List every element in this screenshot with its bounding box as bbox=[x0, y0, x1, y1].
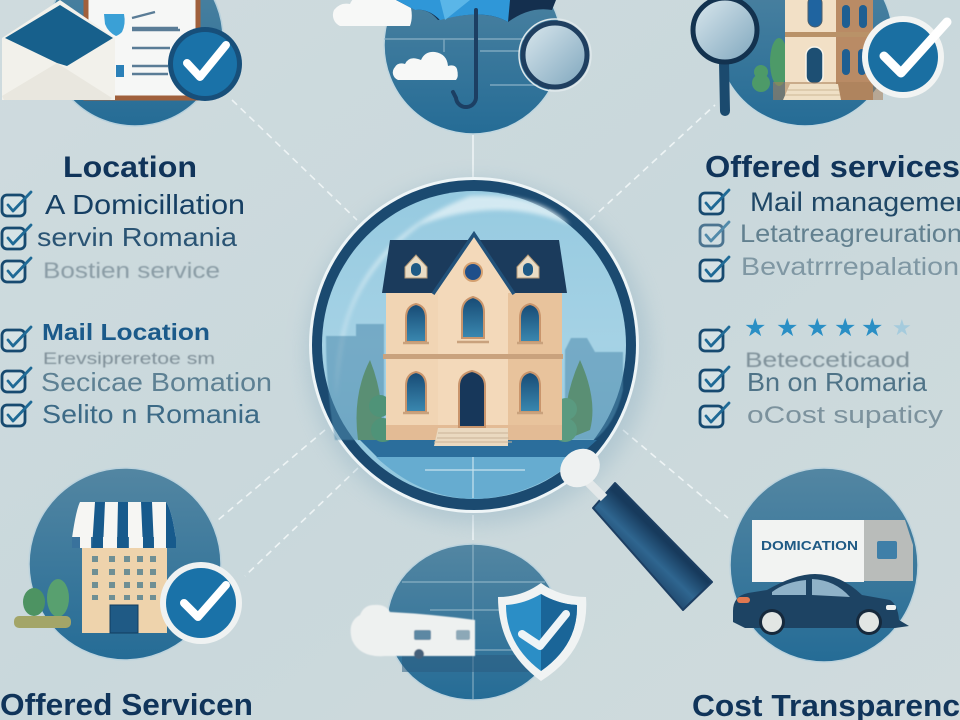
hedges bbox=[14, 579, 71, 628]
truck: DOMICATION bbox=[761, 538, 858, 553]
document bbox=[86, 0, 198, 98]
magnifier bbox=[519, 19, 591, 91]
item 3: Bevatrrrepalation bbox=[741, 253, 959, 281]
check badge bbox=[160, 562, 242, 644]
trees bbox=[356, 360, 592, 442]
item 4: Secicae Bomation bbox=[41, 367, 272, 397]
magnifier bbox=[693, 0, 757, 111]
handle bbox=[588, 482, 712, 610]
icon: storefront, bottom left bbox=[14, 468, 242, 660]
central magnifying glass with house bbox=[306, 177, 712, 610]
ground bbox=[360, 440, 597, 499]
house bbox=[382, 234, 567, 446]
van bbox=[351, 605, 475, 659]
item 5: oCost supaticy bbox=[747, 402, 943, 429]
skyline bbox=[326, 324, 623, 440]
subheading: mail location bbox=[2, 319, 210, 351]
icon: building under magnifier, top right bbox=[693, 0, 947, 126]
item 3 bbox=[2, 258, 220, 283]
item 2: Letatreagreuration bbox=[740, 220, 960, 248]
item 4: Bn on Romaria bbox=[747, 367, 928, 397]
truck bbox=[752, 520, 913, 582]
blurred line: Betecceticaod bbox=[745, 349, 910, 372]
trees bbox=[752, 38, 788, 92]
road bbox=[402, 655, 545, 672]
umbrella bbox=[396, 0, 556, 107]
roof bbox=[382, 240, 567, 293]
star rating bbox=[700, 314, 912, 351]
shield bbox=[498, 583, 586, 681]
clouds bbox=[333, 0, 458, 80]
envelope bbox=[2, 0, 115, 100]
blurred line: Erevsipreretoe sm bbox=[43, 349, 215, 368]
building bbox=[773, 0, 883, 100]
item 1: A Domicillation bbox=[45, 189, 245, 220]
check badge bbox=[168, 27, 242, 101]
star rating: ★ bbox=[892, 315, 912, 340]
heading: Location bbox=[63, 151, 197, 184]
item 2: servin Romania bbox=[37, 222, 238, 252]
subheading: mail location: Mail Location bbox=[42, 319, 210, 345]
upper windows bbox=[406, 297, 540, 412]
connector lines bbox=[218, 100, 728, 576]
item 5 bbox=[700, 402, 943, 429]
heading: Offered services bbox=[705, 149, 960, 184]
awning bbox=[72, 502, 176, 548]
icon: umbrella and magnifier, top centre bbox=[333, 0, 591, 134]
item 3: Bostien service bbox=[43, 258, 220, 283]
item 1: Mail managemer bbox=[750, 187, 960, 217]
round window bbox=[464, 263, 482, 281]
star rating: ★★★★★ bbox=[744, 314, 883, 342]
car bbox=[733, 574, 909, 635]
item 5: Selito n Romania bbox=[42, 399, 261, 429]
dormers bbox=[405, 255, 539, 278]
plinth bbox=[386, 425, 562, 440]
heading and checklist: location bbox=[2, 151, 272, 429]
door bbox=[459, 371, 485, 427]
icon: truck and car, bottom right bbox=[730, 468, 918, 662]
floor band bbox=[383, 354, 563, 359]
icon: shield and van, bottom centre bbox=[351, 544, 586, 700]
icon: mail and document, top left bbox=[2, 0, 242, 126]
heading and checklist: offered services bbox=[700, 149, 960, 429]
steps bbox=[434, 428, 508, 446]
check badge bbox=[862, 16, 947, 98]
building bbox=[82, 548, 167, 633]
lens bbox=[309, 177, 639, 513]
handle collar bbox=[552, 441, 608, 495]
sills bbox=[403, 342, 543, 413]
